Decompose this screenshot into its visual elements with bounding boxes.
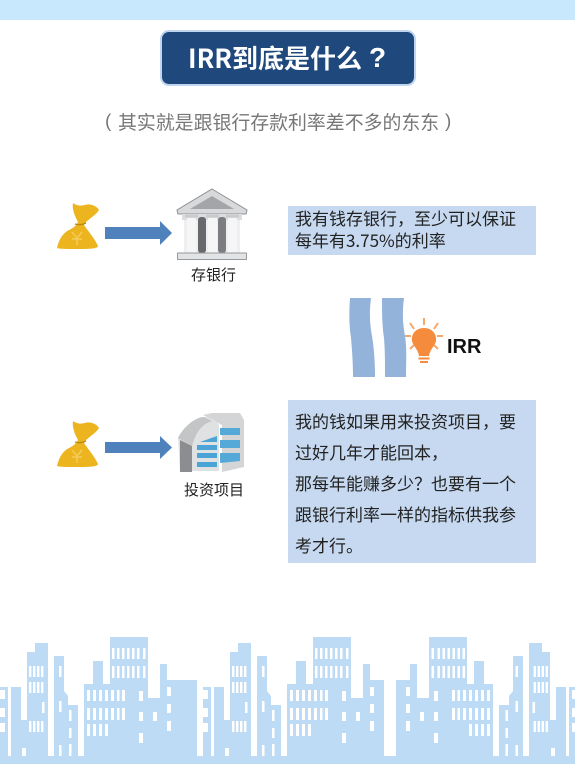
icon: office buildings: [178, 413, 244, 472]
text box: bank: [288, 206, 536, 255]
text box: investment: 我的钱如果用来投资项目，要: [295, 408, 516, 433]
subtitle: 其实就是跟银行存款利率差不多的东东: [118, 108, 439, 135]
icon: wave separators: [349, 298, 406, 377]
subtitle: (: [105, 111, 111, 132]
label: IRR: IRR: [447, 336, 481, 358]
icon: bank: [177, 189, 247, 260]
title: IRR到底是什么: [188, 39, 362, 76]
text box: investment: 过好几年才能回本，: [295, 439, 448, 464]
skyline: [0, 620, 575, 764]
top band: [0, 0, 575, 20]
text box: bank: 每年有3.75%的利率: [295, 227, 446, 252]
arrow bottom: [105, 436, 172, 459]
icon: money bag bottom: [57, 421, 99, 467]
text box: investment: 考才行。: [295, 532, 363, 557]
icon: money bag top: [57, 203, 99, 249]
text box: bank: 我有钱存银行，至少可以保证: [295, 205, 516, 230]
arrow top: [105, 221, 172, 245]
label: bank: 存银行: [191, 264, 236, 285]
text box: investment: 跟银行利率一样的指标供我参: [295, 501, 516, 526]
subtitle: ): [445, 111, 451, 132]
label: project: 投资项目: [184, 479, 244, 500]
text box: investment: [288, 400, 536, 563]
title: ?: [369, 42, 386, 73]
title: [160, 30, 416, 86]
icon: light bulb: [405, 318, 443, 363]
text box: investment: 那每年能赚多少？也要有一个: [295, 470, 516, 495]
